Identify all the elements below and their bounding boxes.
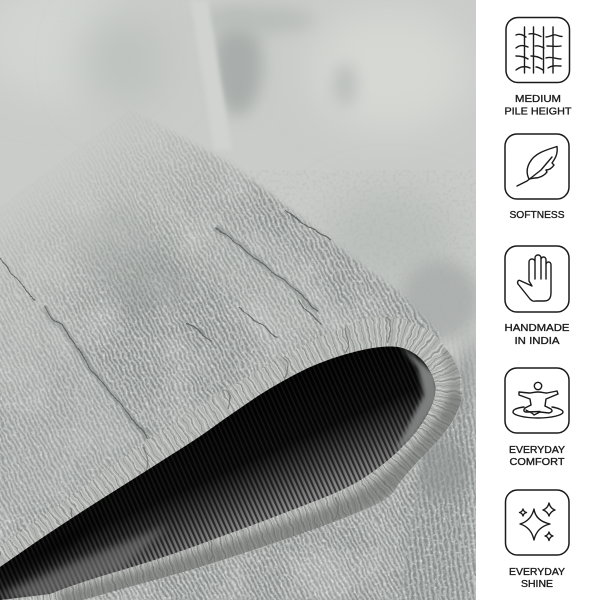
label: softness: SOFTNESS [510,209,564,221]
blurred background of rug [0,0,480,600]
rug surface in foreground floor [100,336,476,600]
label: everyday comfort [509,444,565,468]
icon: meditating figure [505,368,569,433]
icon: sparkles [506,490,569,555]
label: everyday shine [509,566,565,590]
feature: softness [505,134,569,221]
label: everyday comfort: COMFORT [510,456,565,468]
underside of rug (dark ribbed interior) [0,345,438,600]
label: everyday shine: SHINE [521,578,553,590]
feature: medium pile height [504,18,572,118]
icon: raised hand [505,246,569,312]
icon: pile height weave [506,18,570,82]
label: everyday comfort: EVERYDAY [509,444,565,456]
rug photograph [0,0,480,600]
label: everyday shine: EVERYDAY [509,566,565,578]
feature: everyday comfort [505,368,569,468]
icon: feather [505,134,569,199]
top face of rolled rug with carved ribs [0,123,442,600]
label: handmade in India: IN INDIA [514,335,560,347]
carved tear lines [0,210,330,440]
label: medium pile height [504,93,572,118]
label: handmade in India: HANDMADE [504,322,570,334]
feature: handmade in India [504,246,570,347]
white side panel [476,0,600,600]
label: handmade in India [504,322,570,347]
label: medium pile height: MEDIUM [515,93,561,105]
label: medium pile height: PILE HEIGHT [504,106,572,118]
feature: everyday shine [506,490,569,590]
stitched hem edge [0,316,462,600]
hem seams [70,316,390,562]
